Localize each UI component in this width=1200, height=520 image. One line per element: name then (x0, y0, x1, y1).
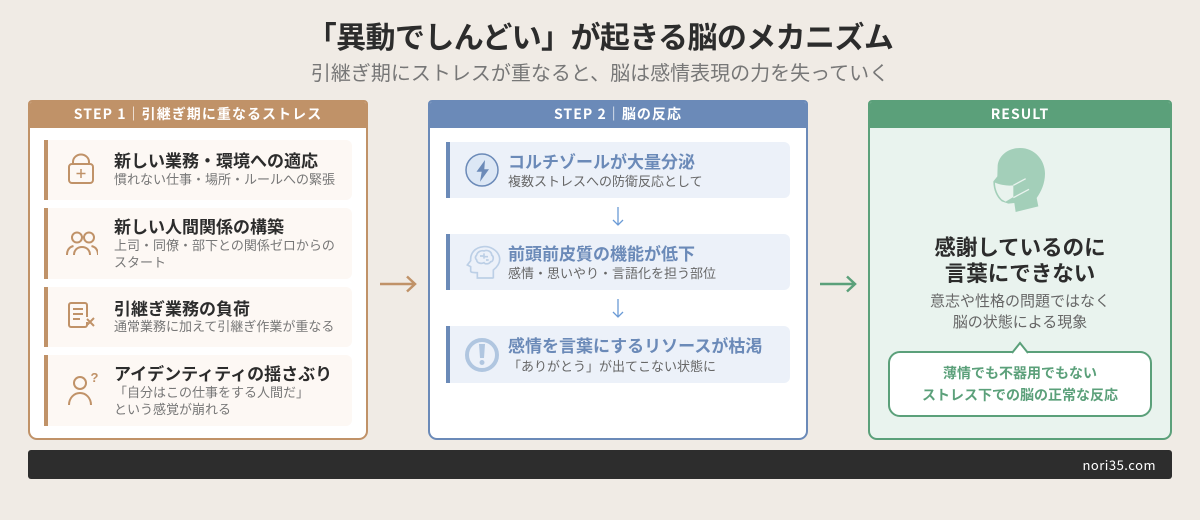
subtitle: 引継ぎ期にストレスが重なると、脳は感情表現の力を失っていく (311, 57, 889, 86)
item description (114, 382, 309, 418)
panel heading: step 2: STEP 2｜脳の反応 (554, 104, 682, 124)
item title: 新しい業務・環境への適応 (114, 147, 318, 172)
panel: result (868, 100, 1172, 440)
panel: step 2 brain response (428, 100, 808, 440)
icon: masked face (993, 148, 1045, 212)
item title: アイデンティティの揺さぶり (114, 360, 332, 385)
item: cortisol (446, 142, 790, 198)
item description: 慣れない仕事・場所・ルールへの緊張 (114, 169, 335, 188)
result description (930, 290, 1110, 332)
icon: document with cross (68, 302, 95, 328)
item description (114, 235, 335, 271)
arrow: step 2 to result (820, 276, 857, 292)
item description: 「ありがとう」が出てこない状態に (508, 356, 716, 375)
item description: 感情・思いやり・言語化を担う部位 (508, 263, 716, 282)
callout pointer (1012, 342, 1028, 354)
title: 「異動でしんどい」が起きる脳のメカニズム (307, 13, 893, 57)
item description: 上司・同僚・部下との関係ゼロからの (114, 235, 335, 254)
item description: スタート (114, 252, 166, 271)
item description: 「自分はこの仕事をする人間だ」 (114, 382, 309, 401)
icon: exclamation in circle (465, 338, 499, 372)
arrow: down (612, 207, 624, 226)
item: new work (44, 140, 352, 200)
footer bar (28, 450, 1172, 479)
icon: head with brain (466, 246, 500, 279)
item title: 前頭前皮質の機能が低下 (508, 240, 695, 265)
panel heading: result (868, 100, 1172, 128)
callout (888, 351, 1152, 417)
arrow: down (612, 299, 624, 318)
panel heading: step 1 (28, 100, 368, 128)
item: identity (44, 355, 352, 426)
item title: 感情を言葉にするリソースが枯渇 (508, 332, 762, 357)
icon: person with question mark (68, 371, 98, 405)
icon: lightning in circle (465, 153, 499, 187)
icon: people (66, 232, 98, 255)
result description: 意志や性格の問題ではなく (930, 290, 1110, 311)
callout: ストレス下での脳の正常な反応 (922, 385, 1118, 405)
item title: 引継ぎ業務の負荷 (114, 295, 250, 320)
item: handover load (44, 287, 352, 347)
panel: step 1 stresses (28, 100, 368, 440)
item description: という感覚が崩れる (114, 399, 231, 418)
panel heading: result: RESULT (991, 104, 1049, 124)
item description: 複数ストレスへの防衛反応として (508, 171, 703, 190)
result headline: 感謝しているのに (934, 231, 1106, 262)
result headline: 言葉にできない (945, 257, 1095, 288)
callout: 薄情でも不器用でもない (943, 363, 1097, 383)
footer bar: nori35.com (1082, 455, 1156, 474)
item: resource depletion (446, 326, 790, 383)
item title: コルチゾールが大量分泌 (508, 148, 695, 173)
result description: 脳の状態による現象 (953, 311, 1087, 332)
arrow: step 1 to step 2 (380, 276, 417, 292)
item title: 新しい人間関係の構築 (114, 213, 284, 238)
result headline (934, 231, 1106, 288)
icon: lock with plus (68, 154, 94, 184)
item: new relationships (44, 208, 352, 279)
item description: 通常業務に加えて引継ぎ作業が重なる (114, 316, 334, 335)
panel heading: step 1: STEP 1｜引継ぎ期に重なるストレス (74, 104, 322, 124)
panel heading: step 2 (428, 100, 808, 128)
item: prefrontal cortex (446, 234, 790, 290)
